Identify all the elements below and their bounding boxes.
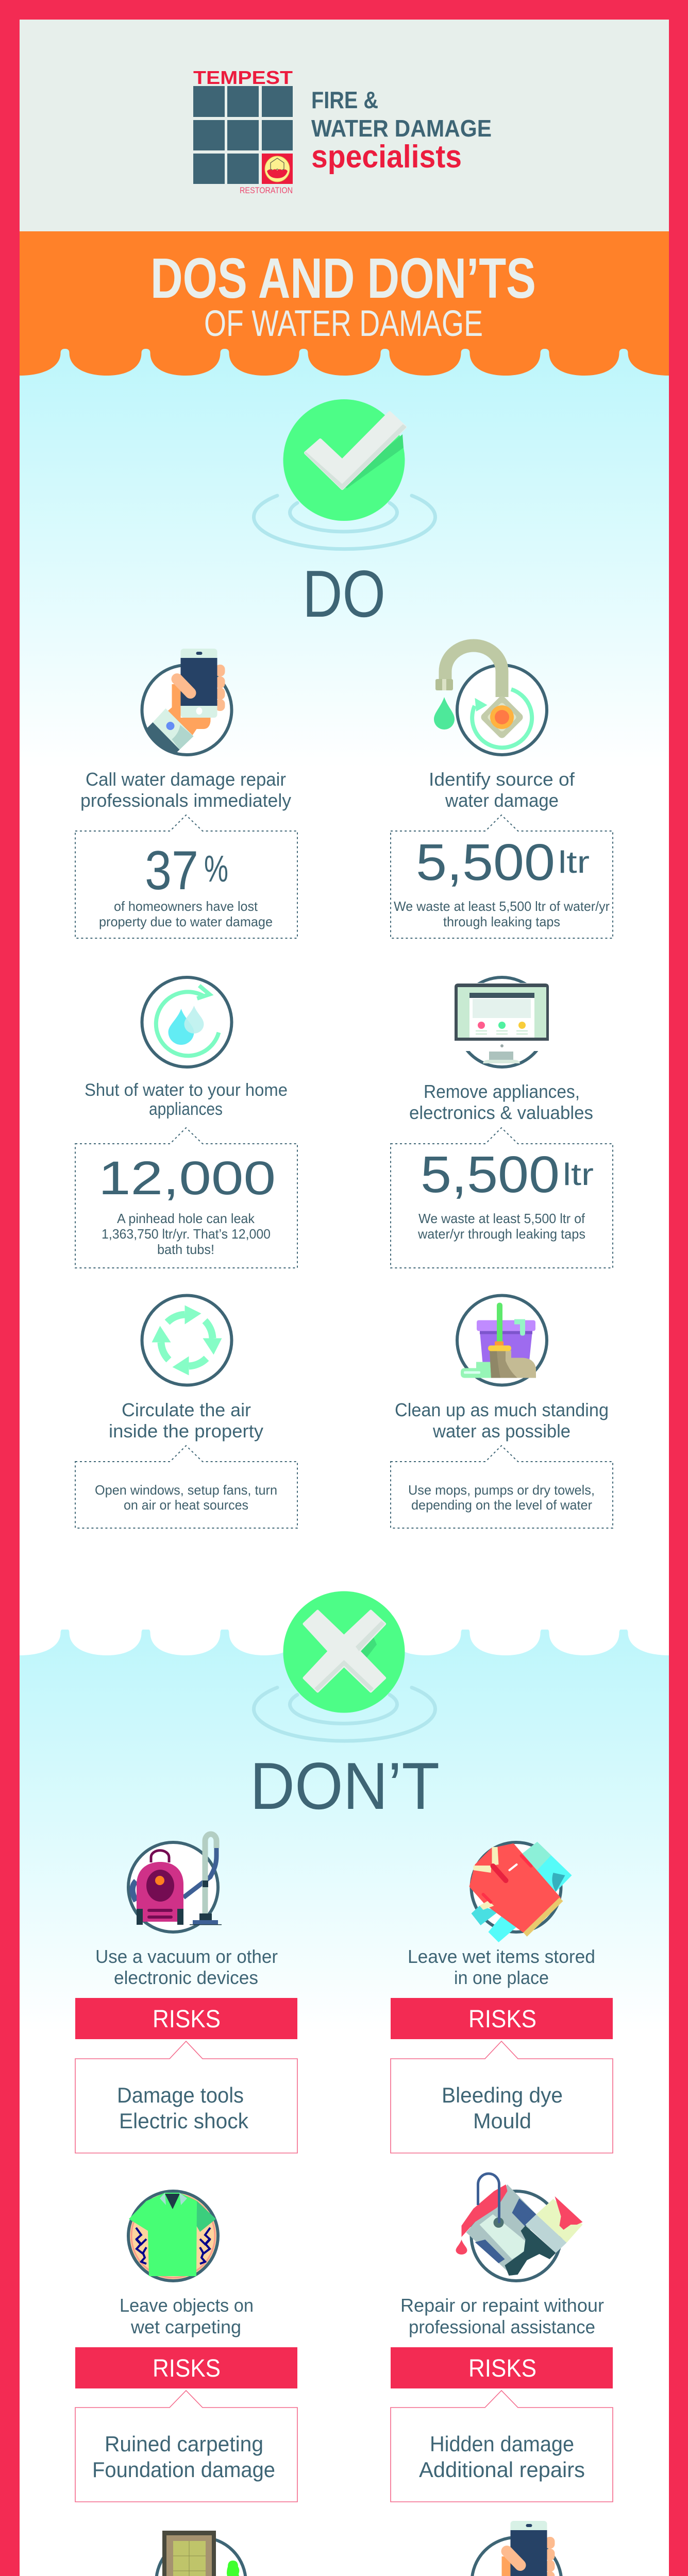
callout text: 1,363,750 ltr/yr. That’s 12,000 <box>102 1226 271 1242</box>
risk list: Electric shock <box>119 2109 249 2133</box>
instruction text: inside the property <box>109 1420 263 1442</box>
logo strapline: FIRE & <box>311 87 378 113</box>
panel: enter property <box>75 2531 297 2576</box>
dotted callout box <box>391 1446 613 1528</box>
panel: clean up <box>391 1295 613 1528</box>
statistic: 5,500 ltr: 5,500 <box>416 834 555 891</box>
dotted callout box <box>391 1128 613 1268</box>
risk list <box>419 2432 585 2482</box>
callout text: property due to water damage <box>99 914 273 929</box>
panel: vacuum <box>75 1834 297 2153</box>
statistic: 37%: % <box>204 849 228 890</box>
logo strapline: WATER DAMAGE <box>311 115 492 142</box>
risks banner: RISKS <box>153 2355 221 2382</box>
icon: cross in floating ball <box>254 1591 435 1741</box>
instruction text <box>395 1399 609 1442</box>
instruction text: Remove appliances, <box>424 1081 580 1102</box>
risks banner: RISKS <box>468 2355 536 2382</box>
risk list <box>92 2432 275 2482</box>
instruction text: water damage <box>445 790 559 811</box>
instruction text: professionals immediately <box>80 790 291 811</box>
icon: paint tin and brush <box>456 2174 582 2281</box>
instruction text: electronics & valuables <box>409 1102 593 1123</box>
icon: hand with phone <box>472 2521 562 2576</box>
instruction text: Call water damage repair <box>86 769 286 790</box>
instruction text <box>85 1080 288 1119</box>
instruction text: Leave objects on <box>120 2295 254 2316</box>
main title: DOS AND DON’TS <box>150 247 536 310</box>
header background <box>20 20 669 232</box>
callout text: We waste at least 5,500 ltr of water/yr <box>394 899 610 914</box>
heading: don't: DON’T <box>250 1749 440 1823</box>
dotted callout box <box>391 815 613 938</box>
instruction text: Use a vacuum or other <box>95 1946 278 1967</box>
logo wordmark tempest: TEMPEST <box>193 67 293 88</box>
icon: shirt on carpet <box>128 2191 218 2281</box>
statistic: 12,000: 12,000 <box>98 1152 276 1205</box>
icon: dripping tap <box>434 646 547 755</box>
instruction text <box>409 1081 593 1123</box>
risks banner <box>391 1998 613 2039</box>
risk list <box>117 2083 249 2133</box>
risks box <box>391 2041 613 2153</box>
instruction text: Leave wet items stored <box>408 1946 595 1967</box>
icon: tick in floating ball <box>254 399 435 549</box>
callout text: through leaking taps <box>443 914 560 929</box>
instruction text <box>120 2295 254 2337</box>
callout text: Open windows, setup fans, turn <box>95 1482 277 1498</box>
title banner <box>20 231 669 376</box>
callout text <box>99 899 273 929</box>
icon: mop and bucket <box>457 1295 547 1385</box>
instruction text <box>400 2295 604 2337</box>
panel: circulate air <box>75 1295 297 1528</box>
instruction text <box>109 1399 263 1442</box>
logo specialists script: specialists <box>311 139 462 175</box>
risk list: Hidden damage <box>430 2432 574 2456</box>
icon: water drops with arrow <box>142 977 232 1067</box>
callout text <box>408 1482 595 1513</box>
risk list <box>442 2083 563 2133</box>
panel: repair repaint <box>391 2174 613 2502</box>
icon: front door and plant <box>156 2531 246 2576</box>
risks box <box>391 2391 613 2502</box>
panel: delay <box>418 2521 613 2576</box>
instruction text: in one place <box>454 1967 549 1988</box>
orange scalloped awning <box>20 231 669 376</box>
instruction text <box>408 1946 595 1988</box>
instruction text: wet carpeting <box>130 2316 241 2337</box>
white wave above don't water <box>20 1511 669 1655</box>
callout text: We waste at least 5,500 ltr of <box>418 1211 585 1226</box>
risk list: Mould <box>473 2109 531 2133</box>
callout text: Use mops, pumps or dry towels, <box>408 1482 595 1498</box>
subtitle: OF WATER DAMAGE <box>204 303 483 344</box>
callout text <box>102 1211 271 1257</box>
risks banner: RISKS <box>468 2006 536 2033</box>
risks banner <box>75 1998 297 2039</box>
dotted callout box <box>75 1128 297 1268</box>
instruction text <box>429 769 575 811</box>
icon: desktop monitor <box>454 977 550 1067</box>
statistic: 37%: 37 <box>145 839 198 901</box>
panel: identify source <box>391 646 613 938</box>
logo house badge <box>262 154 293 184</box>
callout text <box>417 1211 585 1242</box>
dotted callout box <box>75 815 297 938</box>
logo window grid <box>193 86 293 184</box>
water gradient: don't section <box>20 1630 669 2031</box>
icon: pile of clothes <box>469 1842 572 1942</box>
callout text: on air or heat sources <box>124 1497 248 1513</box>
callout text: A pinhead hole can leak <box>117 1211 255 1226</box>
callout text: of homeowners have lost <box>114 899 258 914</box>
icon: hand with phone <box>142 649 232 755</box>
risks banner: RISKS <box>153 2006 221 2033</box>
callout text <box>394 899 610 929</box>
callout text <box>95 1482 277 1513</box>
logo: header <box>193 67 492 195</box>
instruction text: Identify source of <box>429 769 575 790</box>
logo strapline <box>311 87 492 142</box>
water gradient: do section <box>20 349 669 768</box>
statistic: 5,500 ltr: ltr <box>558 845 590 879</box>
instruction text <box>80 769 291 811</box>
risks banner <box>391 2347 613 2388</box>
panel: wet items <box>391 1842 613 2153</box>
panel: shut off water <box>75 977 297 1268</box>
panel: remove appliances <box>391 977 613 1268</box>
instruction text: Clean up as much standing <box>395 1399 609 1420</box>
risk list: Ruined carpeting <box>105 2432 263 2456</box>
risk list: Damage tools <box>117 2083 244 2107</box>
statistic: 5,500 ltr: ltr <box>563 1157 594 1192</box>
instruction text: water as possible <box>432 1420 570 1442</box>
risks banner <box>75 2347 297 2388</box>
callout text: water/yr through leaking taps <box>417 1226 585 1242</box>
risk list: Bleeding dye <box>442 2083 563 2107</box>
icon: vacuum cleaner <box>128 1834 222 1932</box>
callout text: bath tubs! <box>157 1242 214 1257</box>
instruction text: professional assistance <box>409 2316 595 2337</box>
panel: objects on carpet <box>75 2191 297 2502</box>
instruction text: Repair or repaint withour <box>400 2295 604 2316</box>
instruction text: electronic devices <box>114 1967 258 1988</box>
risk list: Additional repairs <box>419 2458 585 2482</box>
dotted callout box <box>75 1446 297 1528</box>
risks box <box>75 2391 297 2502</box>
instruction text: appliances <box>149 1099 223 1119</box>
risk list: Foundation damage <box>92 2458 275 2482</box>
panel: call professionals <box>75 649 297 938</box>
logo restoration label: RESTORATION <box>240 185 293 195</box>
risks box <box>75 2041 297 2153</box>
statistic: 5,500 ltr: 5,500 <box>421 1146 560 1204</box>
instruction text: Shut of water to your home <box>85 1080 288 1100</box>
instruction text: Circulate the air <box>122 1399 251 1420</box>
callout text: depending on the level of water <box>411 1497 592 1513</box>
heading: do: DO <box>303 557 385 631</box>
instruction text <box>95 1946 278 1988</box>
icon: circular arrows <box>142 1295 232 1385</box>
